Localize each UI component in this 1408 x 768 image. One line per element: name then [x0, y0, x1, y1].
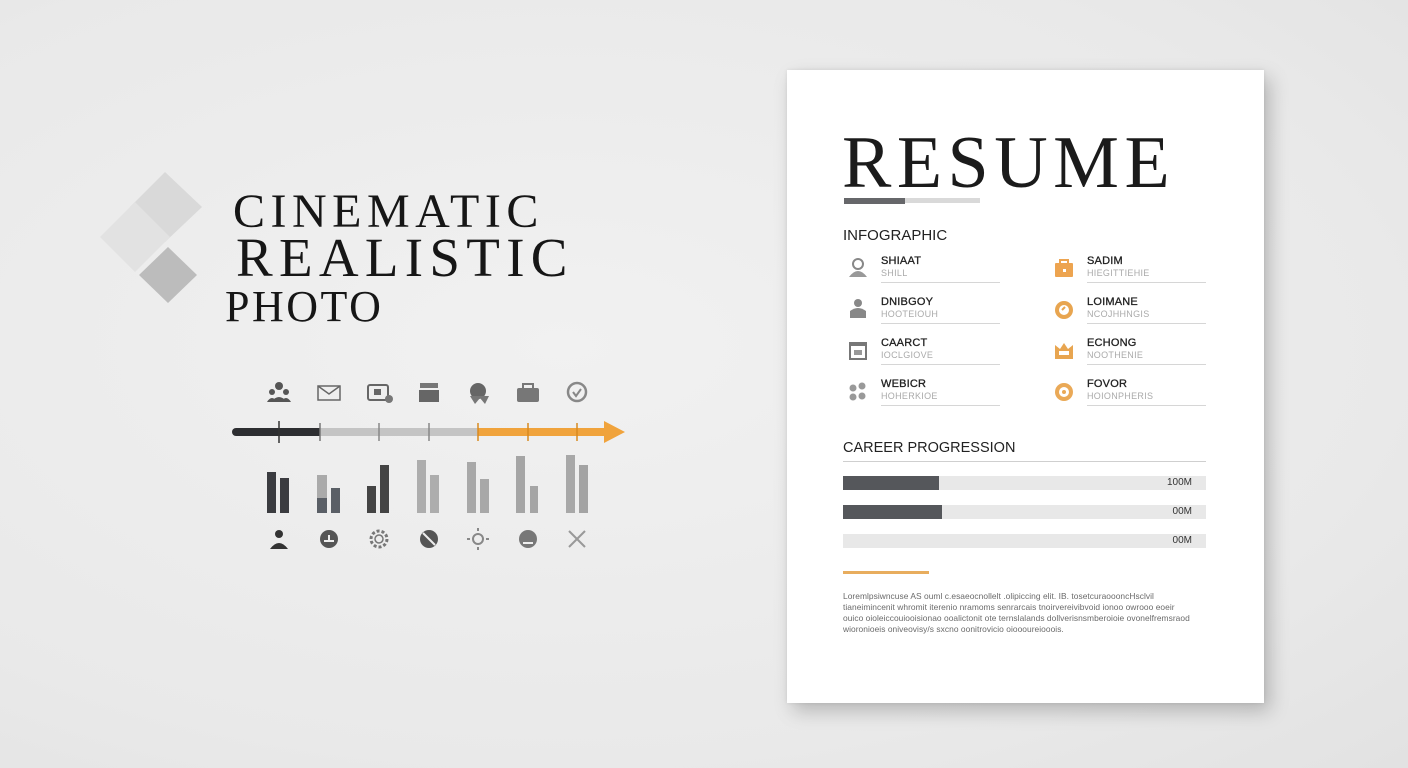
title: cinematic realistic photo: [225, 185, 574, 331]
list: left column: CAARCT: [881, 337, 927, 349]
bars: [267, 472, 276, 513]
list: right column: HOIONPHERIS: [1087, 391, 1153, 401]
title: cinematic realistic photo: PHOTO: [225, 282, 383, 331]
icons top row: [267, 382, 586, 404]
progress bars: 00M: [1173, 535, 1192, 546]
list: left column: IOCLGIOVE: [881, 350, 933, 360]
list: right column: [1055, 255, 1206, 406]
text block: lorem: [843, 591, 1190, 634]
panel: resume paper: [787, 70, 1264, 703]
list: right column: LOIMANE: [1087, 296, 1138, 308]
list: left column: HOOTEIOUH: [881, 309, 938, 319]
list: right column: SADIM: [1087, 255, 1123, 267]
list: right column: NOOTHENIE: [1087, 350, 1143, 360]
list: right column: NCOJHHNGIS: [1087, 309, 1150, 319]
text block: lorem: ouico oioleiccouiooisionao ooalictonit ote ternslalands dollverisnsmberoioie ovonelfremsraod: [843, 613, 1190, 623]
list: left column: HOHERKIOE: [881, 391, 938, 401]
arrow bar: [236, 428, 320, 436]
list: left column: SHILL: [881, 268, 908, 278]
text block: lorem: wioronioeis oniveovisy/s sxcno oonitrovicio oioooureiooois.: [843, 624, 1064, 634]
underline bars: [844, 198, 980, 204]
title: cinematic realistic photo: REALISTIC: [236, 227, 574, 288]
progress bars: [843, 476, 1206, 548]
logo: diamonds: [100, 172, 202, 303]
accent line: [843, 571, 929, 574]
list: left column: SHIAAT: [881, 255, 921, 267]
icons bottom row: [270, 528, 585, 550]
list: right column: ECHONG: [1087, 337, 1136, 349]
heading: career progression: [843, 440, 1206, 462]
list: right column: HIEGITTIEHIE: [1087, 268, 1150, 278]
timeline chart: [232, 382, 625, 550]
text block: lorem: Loremlpsiwncuse AS ouml c.esaeocnollelt .olipiccing elit. IB. tosetcuraoooncHsclvil: [843, 591, 1154, 601]
list: left column: [849, 255, 1000, 406]
progress bars: 00M: [1173, 506, 1192, 517]
title: cinematic realistic photo: CINEMATIC: [233, 185, 544, 238]
list: left column: WEBICR: [881, 378, 926, 390]
progress bars: 100M: [1167, 477, 1192, 488]
text block: lorem: tianeimincenit whromit iterenio nramoms senrarcais tnoirvereivibvoid ionoo owrooo eoeir: [843, 602, 1175, 612]
list: left column: DNIBGOY: [881, 296, 933, 308]
heading: infographic: INFOGRAPHIC: [843, 227, 947, 244]
list: right column: FOVOR: [1087, 378, 1127, 390]
heading: resume: RESUME: [842, 122, 1175, 204]
heading: career progression: CAREER PROGRESSION: [843, 440, 1015, 456]
